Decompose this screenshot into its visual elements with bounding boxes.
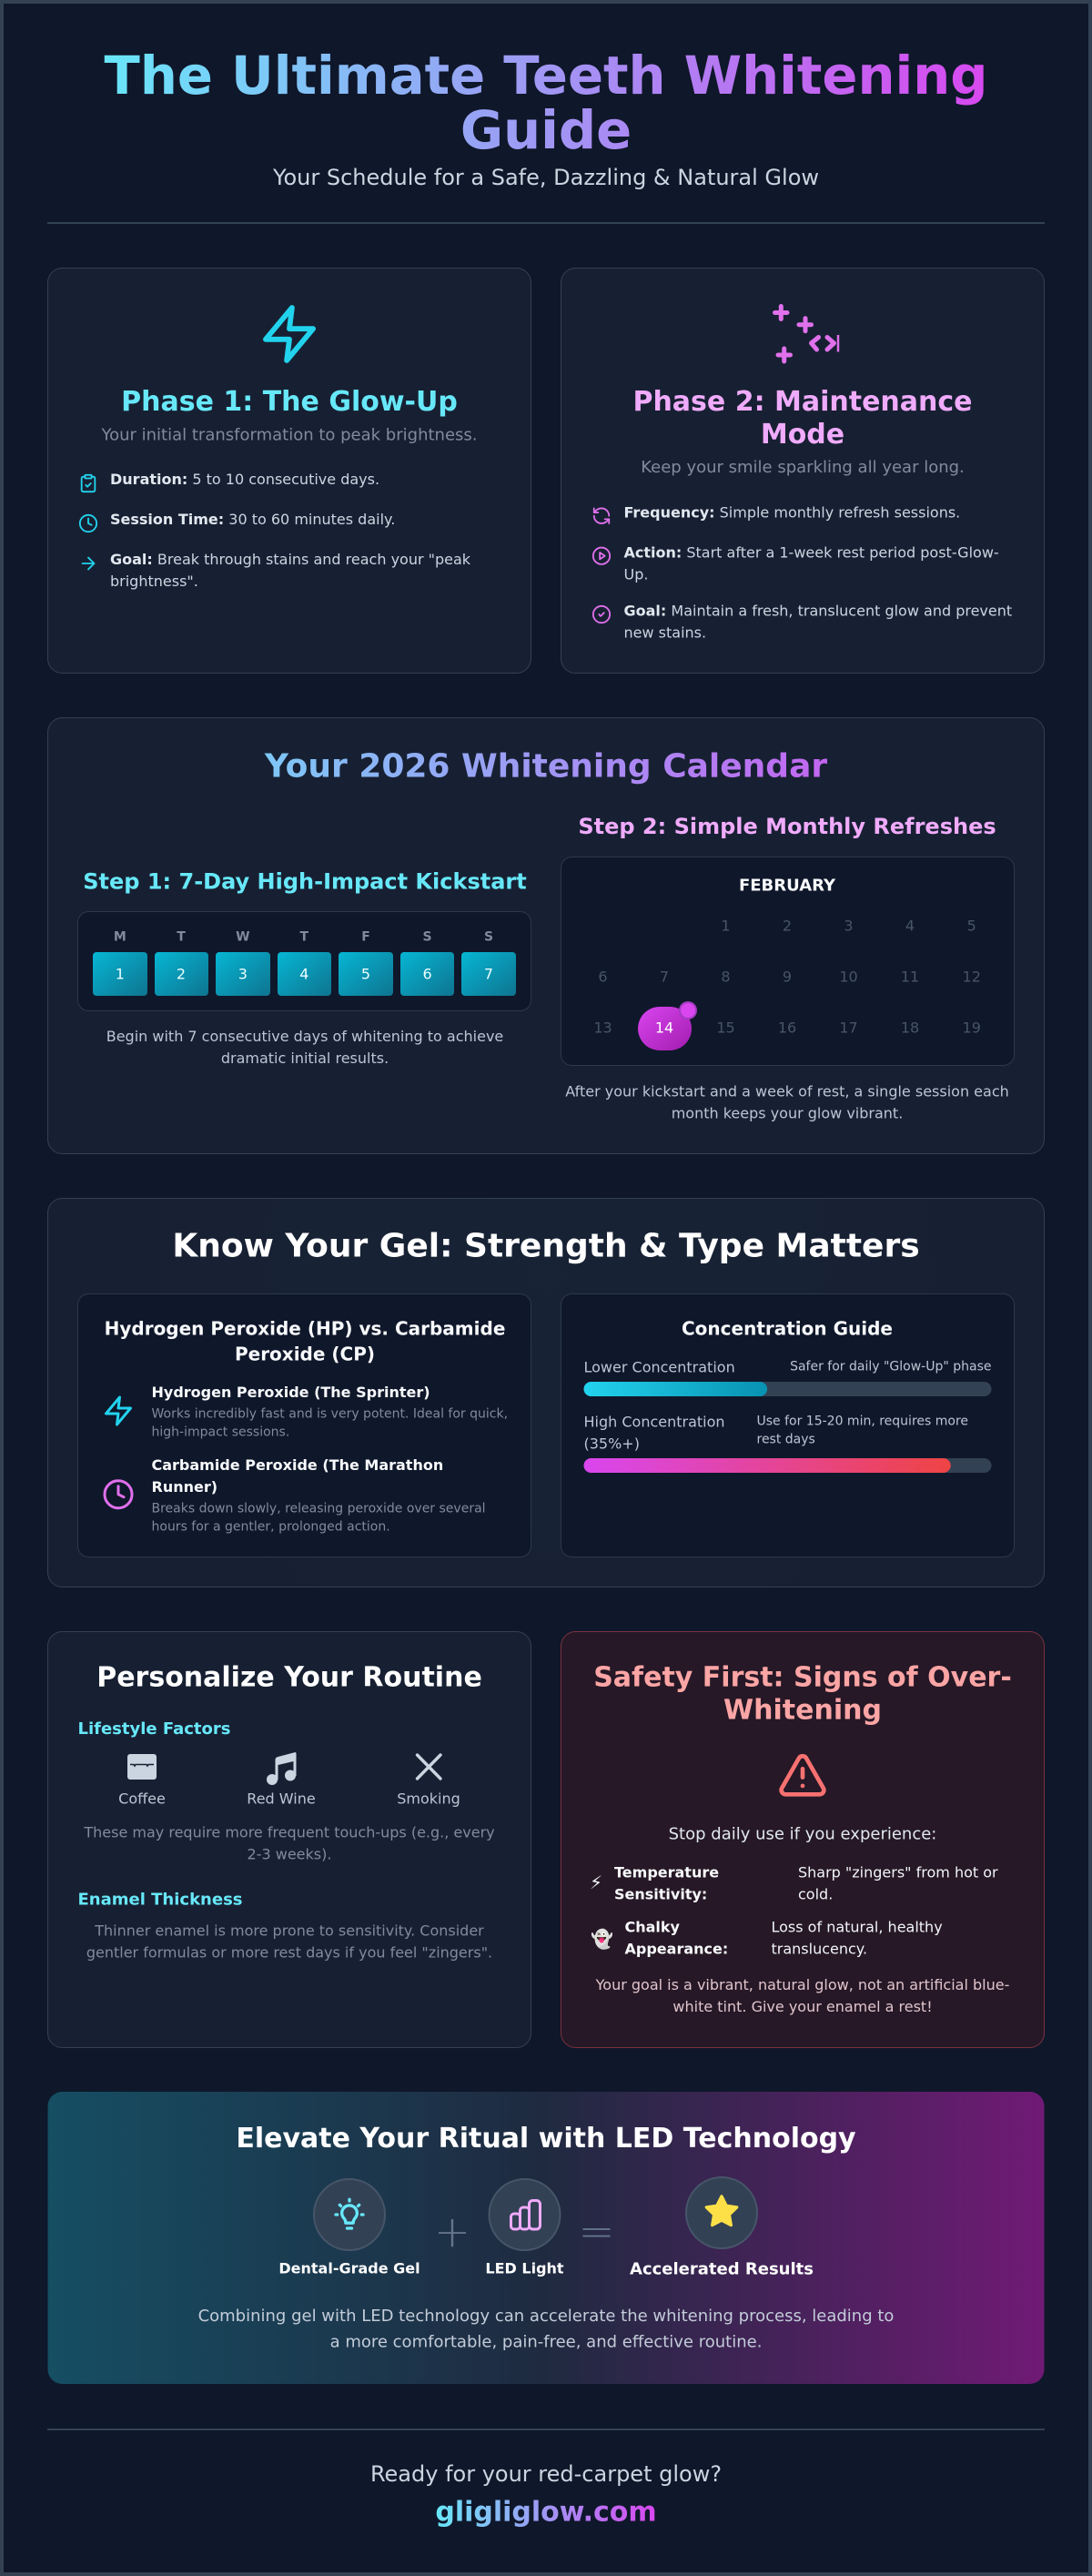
icon: star [706,2196,737,2226]
smoking label: Smoking [397,1790,460,1808]
lower concentration: Lower Concentration [584,1358,735,1376]
circle: led [490,2179,561,2250]
phase 2 heading: Phase 2: Maintenance [632,386,973,418]
safety closing note: Your goal is a vibrant, natural glow, not an artificial blue- [596,1976,1009,1993]
day tiles: 2 [177,965,186,983]
panel: know your gel [47,1198,1045,1587]
high concentration: (35%+) [584,1435,640,1453]
dates: 10 [839,969,858,985]
icon: bolt [106,1397,131,1425]
step 2 heading: Step 2: Simple Monthly Refreshes [578,814,996,839]
step 2 description: month keeps your glow vibrant. [672,1105,903,1121]
icon: coffee [127,1754,157,1780]
coffee label: Coffee [118,1790,166,1808]
hydrogen peroxide: high-impact sessions. [151,1425,289,1440]
icon: bars [511,2201,541,2229]
dates: 3 [844,918,854,934]
symptom: chalky appearance: Chalky [624,1919,680,1935]
icon: music note [267,1752,297,1785]
carbamide peroxide: Carbamide Peroxide (The Marathon [151,1456,443,1474]
title: The Ultimate Teeth Whitening [105,46,987,106]
goal: brightness". [110,573,198,590]
lifestyle note: 2-3 weeks). [248,1846,331,1862]
weekday labels: T [177,930,186,945]
title: Guide [460,100,632,161]
enamel note: gentler formulas or more rest days if you feel "zingers". [86,1944,492,1961]
dates: 2 [783,918,792,934]
duration: Duration: 5 to 10 consecutive days. [110,471,379,488]
plus sign: + [434,2206,470,2257]
panel: calendar [47,717,1045,1154]
day tiles: 6 [423,965,432,983]
symptom: temperature sensitivity: Sharp "zingers" from hot or [798,1864,998,1881]
icon: warning [782,1756,824,1794]
gel label: Dental-Grade Gel [278,2259,420,2277]
symptom: chalky appearance: translucency. [772,1941,867,1957]
weekday labels: M [114,930,126,945]
day tiles: 7 [484,965,493,983]
dates: 11 [901,969,919,985]
symptom: temperature sensitivity: cold. [798,1886,833,1902]
action: Up. [624,566,648,583]
week strip [78,912,531,1010]
frequency: Frequency: Simple monthly refresh sessions. [624,504,960,521]
month name: FEBRUARY [739,876,836,896]
high concentration: High Concentration [584,1413,725,1431]
symptom: chalky appearance: 👻 [591,1928,613,1950]
weekday labels: T [300,930,309,945]
dates: 13 [593,1019,612,1036]
dates: 6 [598,969,608,985]
goal: Goal: Maintain a fresh, translucent glow and prevent [624,603,1012,619]
dates: 1 [721,918,731,934]
action: Action: Start after a 1-week rest period post-Glow- [624,544,999,561]
header [105,46,987,190]
day tiles: 4 [299,965,308,983]
panel: phase 2 [561,268,1045,674]
footer link: gligliglow.com [435,2496,657,2529]
day tiles: 3 [238,965,248,983]
stop notice: Stop daily use if you experience: [669,1824,936,1844]
circle: gel [314,2179,385,2250]
high concentration: Use for 15-20 min, requires more [757,1415,968,1429]
panel: safety [561,1631,1045,2048]
lifestyle heading: Lifestyle Factors [78,1719,231,1739]
dates [593,918,981,1036]
results label: Accelerated Results [630,2259,814,2279]
phase 1 heading: Phase 1: The Glow-Up [121,386,458,418]
dates: 7 [660,969,669,985]
goal: Goal: Break through stains and reach your "peak [110,551,470,568]
icon: lightning bolt [266,308,313,360]
carbamide peroxide: Runner) [151,1478,217,1496]
equals sign: = [578,2206,615,2257]
circle: result [686,2177,757,2248]
carbamide peroxide [151,1456,486,1535]
icon: play circle [593,548,610,564]
hydrogen peroxide [151,1384,508,1440]
dates: 15 [716,1019,735,1036]
enamel heading: Enamel Thickness [78,1890,243,1910]
icon: refresh [594,508,609,523]
safety closing note: white tint. Give your enamel a rest! [672,1998,933,2015]
led label: LED Light [485,2259,564,2277]
card: concentration guide [561,1294,1014,1557]
concentration heading: Concentration Guide [682,1318,893,1340]
footer [370,2461,722,2529]
lifestyle note: These may require more frequent touch-ups (e.g., every [84,1824,495,1841]
day tiles: 1 [116,965,125,983]
dates: 8 [721,969,731,985]
icon: x [417,1755,440,1779]
panel: led technology [47,2092,1045,2384]
dates: 17 [839,1019,858,1036]
icon: light bulb [336,2199,363,2228]
phase 2 heading: Mode [761,419,844,451]
led description: a more comfortable, pain-free, and effective routine. [330,2332,762,2352]
phase 2 subheading: Keep your smile sparkling all year long. [641,458,965,477]
dates: 12 [963,969,981,985]
dates: 18 [901,1019,919,1036]
symptom: temperature sensitivity [590,1864,998,1902]
phase 1 subheading: Your initial transformation to peak brightness. [100,426,477,444]
dates: 16 [778,1019,796,1036]
enamel note: Thinner enamel is more prone to sensitivity. Consider [95,1922,484,1939]
dates: 4 [905,918,915,934]
gel heading: Know Your Gel: Strength & Type Matters [172,1227,920,1265]
icon: clock [105,1481,132,1508]
symptom: chalky appearance: Loss of natural, healthy [772,1919,943,1935]
symptom: temperature sensitivity: Temperature [614,1864,719,1881]
footer prompt: Ready for your red-carpet glow? [370,2461,722,2487]
weekday labels: F [361,930,370,945]
step 1 description: dramatic initial results. [221,1050,389,1067]
symptom: chalky appearance [591,1919,943,1957]
weekday labels: W [236,930,250,945]
red wine label: Red Wine [247,1790,316,1808]
weekday labels: S [423,930,432,945]
high concentration: rest days [757,1433,815,1447]
goal: new stains. [624,624,706,641]
safety heading: Whitening [723,1695,882,1726]
symptom: temperature sensitivity: Sensitivity: [614,1886,707,1902]
weekday labels: S [484,930,493,945]
peroxide heading: Hydrogen Peroxide (HP) vs. Carbamide [105,1318,505,1340]
step 1 heading: Step 1: 7-Day High-Impact Kickstart [83,868,527,894]
day tiles [93,952,516,996]
personalize heading: Personalize Your Routine [96,1662,482,1693]
panel: phase 1 [47,268,531,674]
high concentration [584,1413,992,1473]
subtitle: Your Schedule for a Safe, Dazzling & Natural Glow [272,165,819,190]
session time: Session Time: 30 to 60 minutes daily. [110,511,395,528]
calendar heading: Your 2026 Whitening Calendar [264,748,827,785]
dates: 19 [963,1019,981,1036]
hydrogen peroxide: Works incredibly fast and is very potent. Ideal for quick, [151,1407,508,1422]
step 1 description: Begin with 7 consecutive days of whitening to achieve [106,1028,503,1045]
lower concentration: Safer for daily "Glow-Up" phase [790,1360,992,1374]
symptom: temperature sensitivity: ⚡ [590,1871,602,1893]
step 2 description: After your kickstart and a week of rest, a single session each [565,1083,1009,1100]
card: peroxide types [78,1294,531,1557]
icon: arrow [83,558,94,569]
icon: check circle [593,606,610,623]
highlighted date [638,1001,697,1050]
icon: sparkles [775,306,838,361]
safety heading: Safety First: Signs of Over- [593,1662,1012,1693]
dates: 9 [783,969,792,985]
icon: clipboard check [82,475,95,492]
weekday labels [114,930,493,945]
hydrogen peroxide: Hydrogen Peroxide (The Sprinter) [151,1384,430,1401]
month calendar [561,857,1014,1065]
led description: Combining gel with LED technology can accelerate the whitening process, leading to [198,2307,894,2326]
lower concentration [584,1358,992,1396]
carbamide peroxide: Breaks down slowly, releasing peroxide over several [151,1502,486,1516]
symptom: chalky appearance: Appearance: [624,1941,728,1957]
panel: personalize [47,1631,531,2048]
highlighted date: 14 [655,1019,673,1036]
peroxide heading: Peroxide (CP) [235,1344,375,1365]
day tiles: 5 [361,965,370,983]
icon: clock [80,515,96,532]
led heading: Elevate Your Ritual with LED Technology [236,2123,856,2155]
carbamide peroxide: hours for a gentler, prolonged action. [151,1520,390,1535]
dates: 5 [967,918,976,934]
